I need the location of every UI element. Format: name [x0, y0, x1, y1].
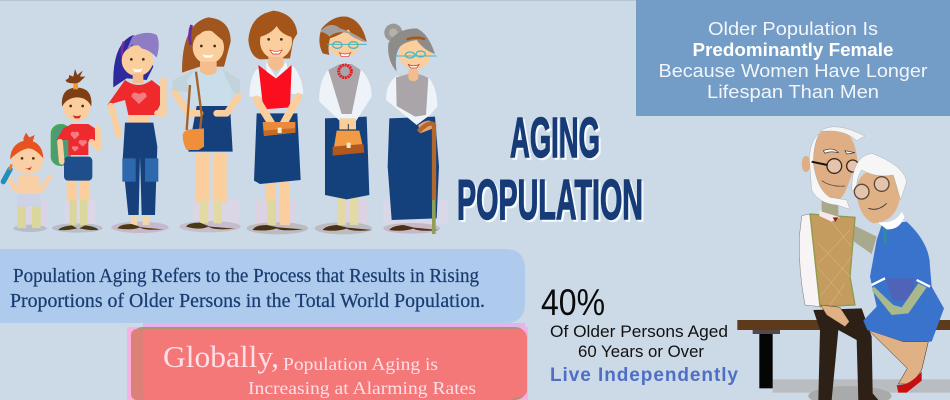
statistic: 40 percent live independently: 40% [541, 282, 605, 323]
figure: baby [3, 133, 50, 232]
title: Aging Population [457, 106, 645, 234]
figure: girl with backpack [52, 69, 103, 233]
figure: middle-aged woman in red vest [247, 11, 308, 234]
statistic: 40 percent live independently: Of Older Persons Aged [550, 322, 728, 341]
callout text: Globally, [163, 339, 279, 374]
panel text [658, 19, 928, 102]
definition text: Proportions of Older Persons in the Total World Population. [10, 290, 485, 312]
figure: elderly woman [852, 153, 944, 393]
title: Aging Population: AGING [512, 108, 602, 172]
panel: older population is predominantly female [636, 0, 950, 116]
illustration: women from infancy to old age [3, 11, 448, 234]
statistic: 40 percent live independently [541, 282, 738, 386]
callout text: Population Aging is [283, 354, 438, 374]
title: Aging Population: AGING [510, 106, 600, 170]
figure: elderly man [799, 127, 878, 400]
statistic: 40 percent live independently: 60 Years or Over [578, 342, 704, 361]
panel text: Predominantly Female [692, 40, 894, 60]
title: Aging Population: POPULATION [459, 170, 645, 234]
figure: older woman with handbag [315, 16, 372, 234]
title: Aging Population: POPULATION [457, 168, 643, 232]
panel: population aging definition [0, 249, 525, 323]
callout text: Increasing at Alarming Rates [248, 378, 476, 398]
floor shadow and bench [737, 320, 950, 400]
figure: teenager [107, 33, 169, 233]
callout text [163, 339, 476, 398]
definition text [10, 265, 485, 312]
statistic: 40 percent live independently: Live Independently [550, 365, 738, 386]
panel: globally population aging is increasing [127, 323, 528, 400]
illustration: elderly couple on a bench [737, 127, 950, 400]
panel text: Lifespan Than Men [707, 82, 879, 102]
definition text: Population Aging Refers to the Process that Results in Rising [13, 265, 479, 287]
figure: young woman with shoulder bag [172, 17, 241, 232]
panel text: Older Population Is [708, 19, 878, 39]
figure: grandmother with cane [383, 24, 448, 234]
panel text: Because Women Have Longer [658, 61, 928, 81]
